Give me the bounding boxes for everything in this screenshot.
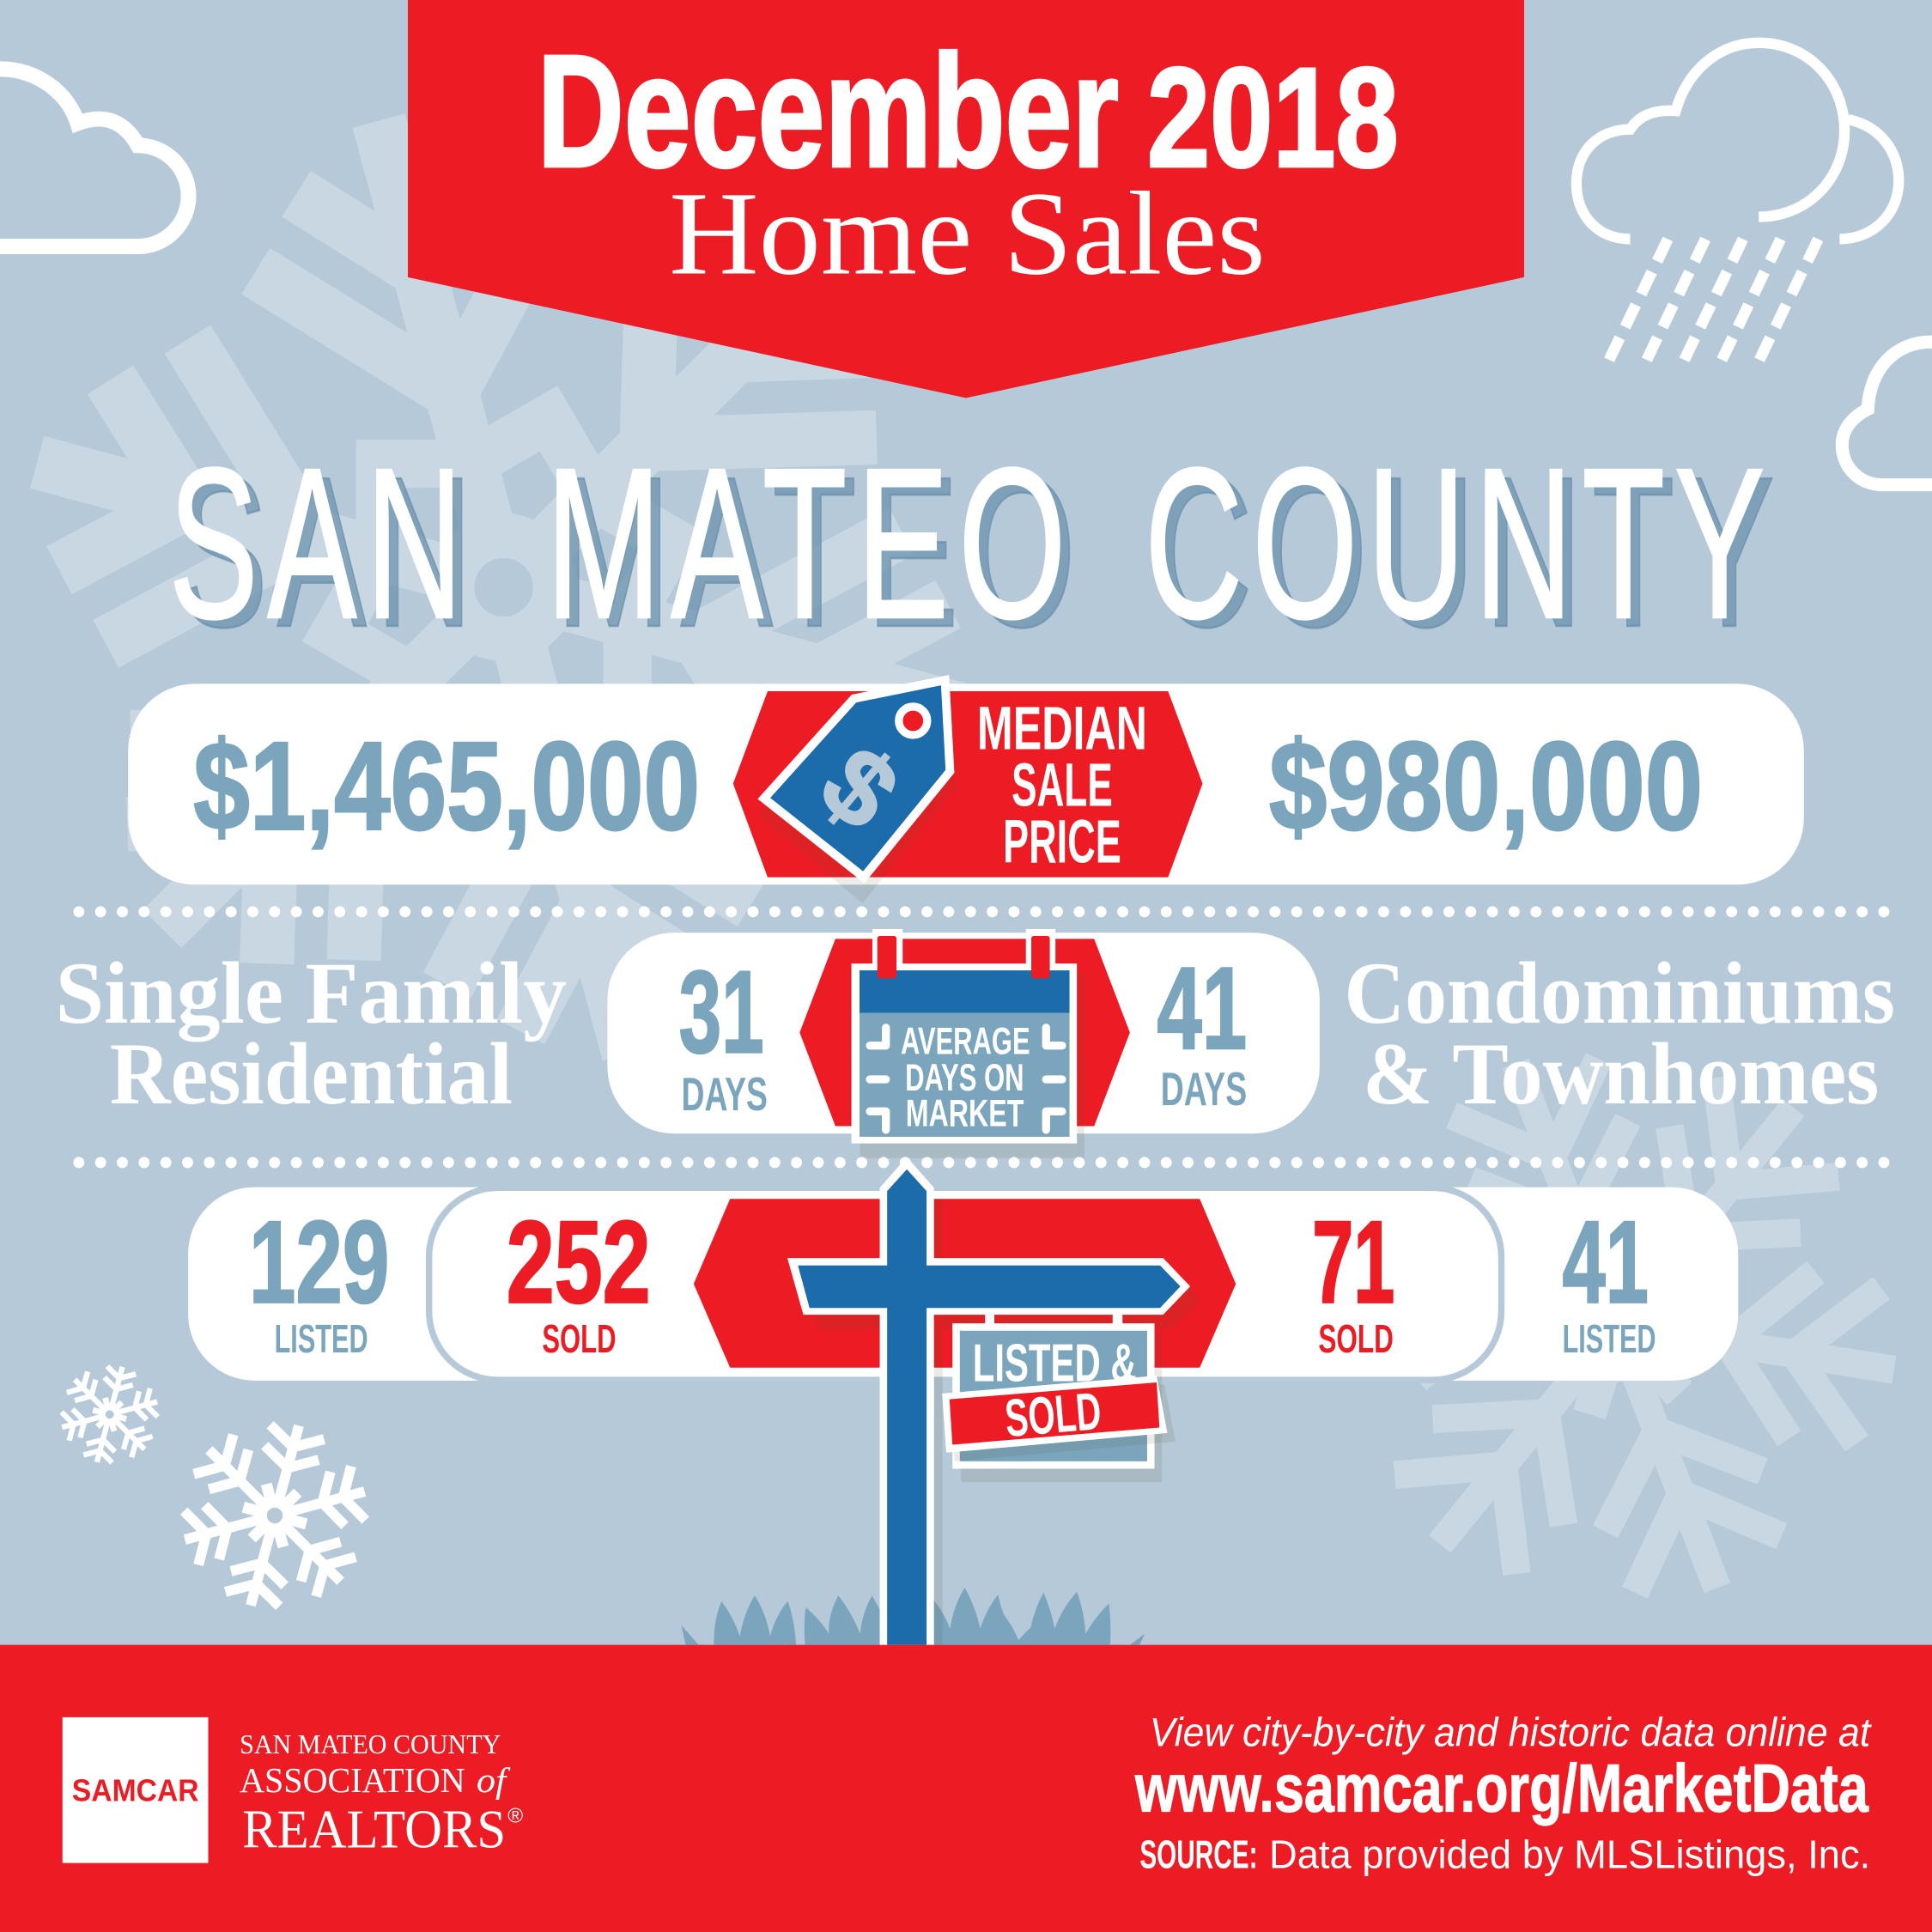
value: 252 sold: [507, 1197, 651, 1361]
panel: median sale price: [128, 680, 1804, 903]
value: 129 listed: LISTED: [275, 1316, 368, 1361]
value: 41 listed: [1563, 1197, 1656, 1361]
association name: REALTORS: [242, 1800, 506, 1860]
call to action text: [1134, 1710, 1872, 1876]
value: 41 days: DAYS: [1161, 1063, 1247, 1115]
label: sold: SOLD: [1003, 1382, 1103, 1449]
value: 31 days: DAYS: [682, 1068, 768, 1121]
label: median sale price: MEDIAN: [977, 694, 1147, 762]
value: 71 sold: [1312, 1197, 1394, 1361]
icon: price tag: $: [799, 724, 920, 853]
panel: average days on market: [607, 929, 1320, 1158]
value: 31 days: [679, 946, 768, 1121]
label: average days on market: [901, 1021, 1030, 1135]
icon: cloud top left: [0, 69, 189, 246]
label: Single Family Residential: Single Family: [56, 945, 567, 1042]
value: 41 listed: LISTED: [1563, 1316, 1656, 1361]
logo box: [63, 1717, 209, 1863]
icon: price tag: [764, 680, 950, 878]
shadow of price tag: [757, 688, 957, 903]
shadow of post and arm: [813, 1199, 1200, 1645]
value: 41 listed: 41: [1563, 1197, 1649, 1327]
label: Condominiums and Townhomes: [1345, 945, 1895, 1123]
heading: San Mateo County: MATEO: [546, 423, 1076, 663]
label: Single Family Residential: Residential: [110, 1025, 513, 1123]
heading: San Mateo County: SAN: [179, 432, 482, 671]
heading: December 2018: December: [538, 21, 1119, 201]
footer: [0, 1645, 1932, 1932]
label: Single Family Residential: [56, 945, 567, 1123]
label: average days on market: DAYS ON: [905, 1057, 1024, 1099]
divider dots: [79, 1158, 1885, 1166]
label: listed and: LISTED &: [973, 1334, 1137, 1394]
association name: ASSOCIATION: [240, 1761, 465, 1800]
heading: San Mateo County: [169, 423, 1784, 671]
label: median sale price: PRICE: [1003, 807, 1121, 876]
association name: ®: [507, 1804, 523, 1827]
value: condo price: $980,000: [1269, 717, 1703, 857]
title banner: [408, 0, 1524, 398]
label: average days on market: AVERAGE: [901, 1021, 1030, 1063]
red hexagon: [694, 1199, 1236, 1368]
label: Condominiums and Townhomes: Condominiums: [1345, 945, 1895, 1042]
background snowflake: large left: [0, 0, 1109, 1182]
call to action text: Data provided by MLSListings, Inc.: [1269, 1832, 1870, 1876]
icon: calendar: [852, 929, 1077, 1144]
value: 71 sold: SOLD: [1318, 1316, 1394, 1361]
red hexagon: [799, 939, 1130, 1127]
snowflake: small white: [49, 1354, 171, 1475]
grass: [682, 1588, 1145, 1645]
label: median sale price: [977, 694, 1147, 876]
background snowflake: large right: [1249, 961, 1932, 1691]
association name: of: [477, 1761, 511, 1800]
value: 252 sold: SOLD: [542, 1316, 616, 1361]
value: 41 days: 41: [1157, 943, 1247, 1073]
logo box: SAMCAR: [72, 1774, 199, 1808]
value: 71 sold: 71: [1312, 1197, 1394, 1327]
label: Condominiums and Townhomes: & Townhomes: [1363, 1025, 1879, 1123]
call to action text: View city-by-city and historic data online at: [1150, 1710, 1872, 1755]
subheading: Home Sales: Home Sales: [669, 168, 1266, 301]
icon: cloud right edge: [1842, 342, 1932, 485]
value: 129 listed: [249, 1197, 389, 1361]
divider dots: [79, 908, 1885, 915]
shadow of calendar: [860, 974, 1084, 1158]
label: median sale price: SALE: [1012, 750, 1113, 819]
heading: San Mateo County: SAN: [169, 423, 472, 663]
icon: hanging sign listed and sold: [942, 1315, 1176, 1482]
value: 252 sold: 252: [507, 1197, 651, 1327]
label: average days on market: MARKET: [906, 1093, 1024, 1135]
association name: [240, 1729, 523, 1860]
heading: December 2018: 2018: [1147, 39, 1399, 197]
red hexagon: [733, 691, 1203, 878]
value: 41 days: [1157, 943, 1247, 1115]
heading: San Mateo County: MATEO: [556, 432, 1085, 671]
value: single family price: $1,465,000: [193, 717, 700, 857]
icon: rain cloud top right: [1577, 43, 1899, 360]
icon: sign post: [787, 1157, 1190, 1645]
inner pill: sold: [429, 1188, 1501, 1380]
value: 129 listed: 129: [249, 1197, 389, 1327]
panel: listed and sold: [188, 1188, 1738, 1381]
call to action text: SOURCE:: [1139, 1832, 1258, 1876]
snowflake: large white: [160, 1401, 390, 1630]
association name: SAN MATEO COUNTY: [240, 1729, 501, 1759]
value: 31 days: 31: [679, 946, 764, 1077]
